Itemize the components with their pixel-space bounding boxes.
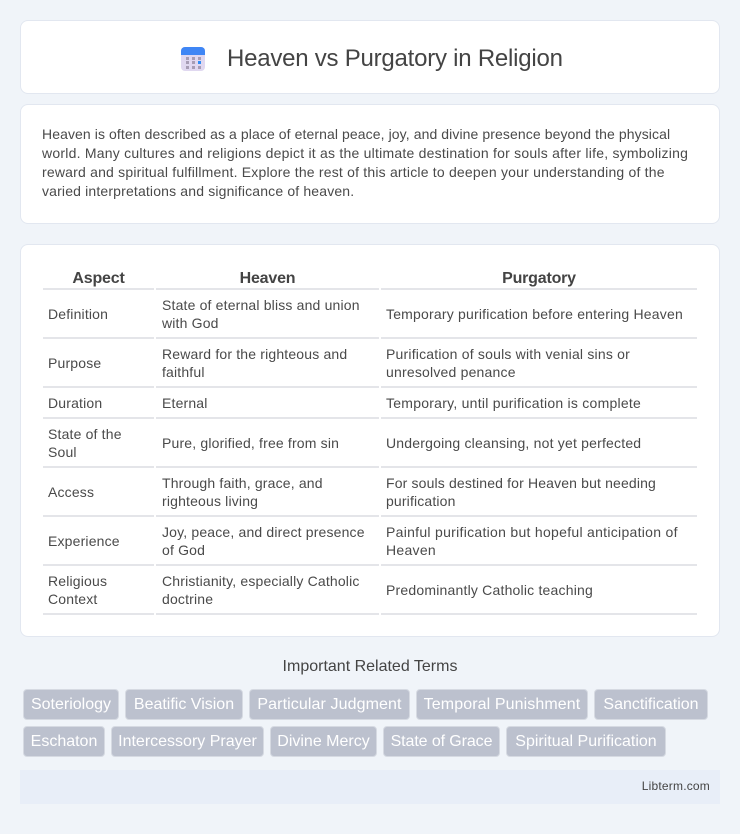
intro text: world. Many cultures and religions depict it as the ultimate destination for souls after life, symbolizing <box>42 145 688 161</box>
intro text: varied interpretations and significance of heaven. <box>42 183 354 199</box>
comparison table: Heaven <box>386 542 436 558</box>
panel: title card <box>20 20 720 94</box>
row: Religious Context: Context <box>48 591 97 607</box>
related term tags: Eschaton <box>31 733 97 750</box>
comparison table: Temporary, until purification is complete <box>386 395 641 411</box>
comparison table: Undergoing cleansing, not yet perfected <box>386 435 641 451</box>
related term tags: Beatific Vision <box>134 696 234 713</box>
comparison table: Temporary purification before entering Heaven <box>386 306 683 322</box>
related term tags: Spiritual Purification <box>515 733 657 750</box>
row: State of the Soul <box>48 426 122 460</box>
comparison table: of God <box>162 542 205 558</box>
related term tags: State of Grace <box>391 733 492 750</box>
row: Experience: Experience <box>48 533 120 549</box>
comparison table: Reward for the righteous and <box>162 346 347 362</box>
related term tags: Sanctification <box>603 696 699 713</box>
row: Duration: Duration <box>48 395 102 411</box>
footer credit: Libterm.com <box>642 779 710 793</box>
related term tags: Divine Mercy <box>277 733 370 750</box>
comparison table: doctrine <box>162 591 213 607</box>
comparison table: Pure, glorified, free from sin <box>162 435 339 451</box>
row: State of the Soul: Soul <box>48 444 77 460</box>
title: Heaven vs Purgatory in Religion <box>227 45 563 72</box>
comparison table: righteous living <box>162 493 258 509</box>
heading: related terms: Important Related Terms <box>283 658 457 675</box>
icon: calendar <box>181 47 205 71</box>
related term tags: Particular Judgment <box>257 696 402 713</box>
header: Aspect: Aspect <box>72 270 125 287</box>
header: Heaven: Heaven <box>240 270 295 287</box>
row: Purpose: Purpose <box>48 355 101 371</box>
comparison table: purification <box>386 493 456 509</box>
related term tags: Intercessory Prayer <box>118 733 257 750</box>
row: Definition: Definition <box>48 306 108 322</box>
intro text: Heaven is often described as a place of eternal peace, joy, and divine presence beyond the physical <box>42 126 670 142</box>
header: Purgatory: Purgatory <box>502 270 576 287</box>
intro text: reward and spiritual fulfillment. Explore the rest of this article to deepen your understanding of the <box>42 164 665 180</box>
comparison table: Painful purification but hopeful anticipation of <box>386 524 678 540</box>
comparison table: Predominantly Catholic teaching <box>386 582 593 598</box>
intro text <box>42 126 688 199</box>
comparison table: State of eternal bliss and union <box>162 297 360 313</box>
panel: comparison table <box>20 244 720 637</box>
related term tags <box>23 689 708 757</box>
comparison table: Eternal <box>162 395 208 411</box>
comparison table: unresolved penance <box>386 364 516 380</box>
comparison table: with God <box>162 315 219 331</box>
comparison table: Purification of souls with venial sins or <box>386 346 630 362</box>
related term tags: Soteriology <box>31 696 111 713</box>
comparison table: Through faith, grace, and <box>162 475 323 491</box>
comparison table: For souls destined for Heaven but needing <box>386 475 656 491</box>
comparison table: Christianity, especially Catholic <box>162 573 360 589</box>
panel: introduction <box>20 104 720 224</box>
comparison table: faithful <box>162 364 205 380</box>
row: Religious Context: Religious <box>48 573 107 589</box>
related term tags: Temporal Punishment <box>424 696 580 713</box>
footer <box>20 770 720 804</box>
row: Religious Context <box>48 573 107 607</box>
row: State of the Soul: State of the <box>48 426 122 442</box>
comparison table: Joy, peace, and direct presence <box>162 524 365 540</box>
row: Access: Access <box>48 484 94 500</box>
